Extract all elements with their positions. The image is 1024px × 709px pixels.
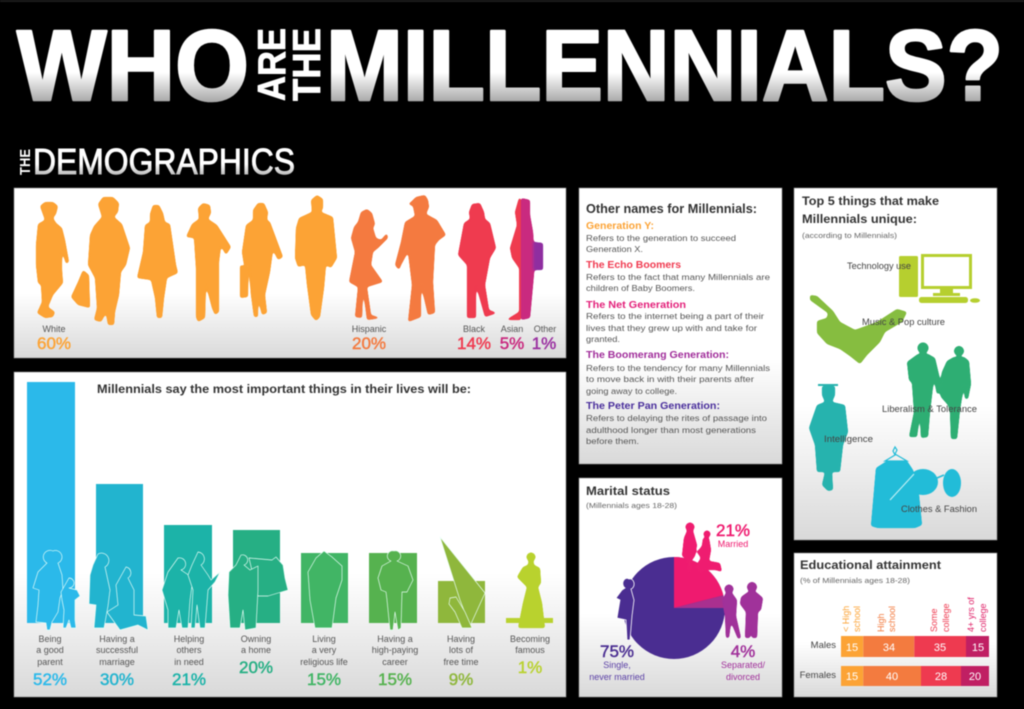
bar: successful marriage: marriage: [99, 657, 135, 667]
marital labels: 4%: [731, 642, 755, 661]
panel: educational attainment: [794, 553, 997, 697]
bar: helping others: [162, 525, 220, 689]
icon: graduate: [809, 384, 848, 491]
top-5 labels: Technology use: [847, 261, 911, 271]
bar: owning a home: a home: [241, 645, 271, 655]
stacked bar: males: 35: [934, 642, 946, 654]
name: boomerang generation: going away to college.: [586, 386, 677, 396]
stacked bar: males: [811, 636, 989, 657]
heading: (% of Millennials ages 18-28): [800, 576, 911, 585]
panel: top 5 things: [794, 188, 997, 540]
top-5 labels: Clothes & Fashion: [901, 504, 977, 514]
column labels: college: [941, 603, 951, 632]
column labels: college: [978, 603, 988, 632]
name: boomerang generation: [586, 350, 771, 396]
name: echo boomers: children of Baby Boomers.: [586, 283, 695, 293]
name: echo boomers: The Echo Boomers: [586, 260, 681, 271]
demographic labels: Other: [534, 324, 556, 334]
panel: most important things: [14, 372, 566, 697]
bar: successful marriage: Having a: [99, 634, 135, 644]
marital labels: Separated/: [721, 660, 766, 670]
title: THE: [286, 28, 329, 101]
panel: other names: [579, 188, 782, 464]
name: echo boomers: [586, 260, 770, 293]
bar: high-paying career: high-paying: [372, 645, 418, 655]
bar: being a good parent: a good: [36, 645, 64, 655]
icon: computer: [899, 254, 980, 303]
heading: Millennials say the most important things in their lives will be:: [97, 384, 471, 396]
heading: (according to Millennials): [802, 231, 898, 240]
bar: free time: lots of: [449, 645, 474, 655]
bar: free time: Having: [447, 634, 475, 644]
bar: religious life: 15%: [307, 670, 341, 689]
demographic labels: Asian: [501, 324, 523, 334]
bar: free time: 9%: [449, 670, 473, 689]
bar: owning a home: 20%: [239, 658, 273, 677]
stacked bar: females: 15: [846, 671, 858, 683]
bar: successful marriage: [89, 484, 148, 689]
heading: [802, 194, 939, 240]
heading: Other names for Millennials:: [586, 202, 757, 216]
top-5 labels: Liberalism & Tolerance: [882, 404, 977, 414]
bar: being a good parent: 52%: [33, 670, 67, 689]
bar: being a good parent: parent: [37, 657, 63, 667]
silhouettes: white: [36, 195, 337, 325]
marital labels: never married: [589, 672, 645, 682]
name: peter pan generation: [586, 401, 767, 446]
bar: helping others: 21%: [172, 670, 206, 689]
stacked bar: females: [800, 666, 989, 686]
bar: becoming famous: Becoming: [510, 634, 550, 644]
name: net generation: Refers to the internet being a part of their: [586, 311, 764, 321]
demographic labels: 1%: [532, 334, 556, 353]
heading: [800, 558, 941, 585]
bar: helping others: in need: [174, 657, 204, 667]
marital labels: divorced: [726, 672, 760, 682]
bar: successful marriage: successful: [96, 645, 138, 655]
stacked bar: females: 20: [969, 671, 981, 683]
name: net generation: The Net Generation: [586, 300, 686, 311]
name: net generation: lives that they grew up with and take for: [586, 323, 757, 333]
bar: owning a home: Owning: [241, 634, 271, 644]
stacked bar: males: 15: [846, 642, 858, 654]
figure: single: [616, 578, 634, 640]
bar: helping others: others: [176, 645, 202, 655]
stacked bar: males: Males: [811, 640, 836, 651]
bar: becoming famous: famous: [515, 645, 545, 655]
demographic labels: 60%: [37, 334, 71, 353]
bar: religious life: Living: [312, 634, 336, 644]
bar: being a good parent: [27, 382, 80, 689]
marital labels: [589, 521, 766, 682]
marital labels: 75%: [600, 642, 634, 661]
bar: religious life: a very: [312, 645, 337, 655]
silhouette: asian half: [506, 198, 521, 320]
icon: couple: [907, 342, 971, 439]
top-5 labels: Music & Pop culture: [862, 317, 945, 327]
column labels: school: [852, 606, 862, 632]
heading: [586, 484, 678, 510]
bar: becoming famous: 1%: [518, 658, 542, 677]
name: generation y: [586, 221, 736, 254]
stacked bar: females: 40: [886, 671, 898, 683]
bar: religious life: [300, 551, 348, 689]
title: [17, 10, 1003, 122]
bar: high-paying career: Having a: [377, 634, 413, 644]
section heading: the demographics: DEMOGRAPHICS: [33, 141, 295, 182]
bar: high-paying career: career: [382, 657, 408, 667]
bar: becoming famous: [506, 552, 553, 677]
name: generation y: Generation Y:: [586, 221, 654, 232]
name: echo boomers: Refers to the fact that many Millennials are: [586, 272, 770, 282]
name: net generation: [586, 300, 764, 344]
icon: dancer: [810, 295, 907, 364]
demographic labels: 14%: [457, 334, 491, 353]
silhouettes: black: [458, 198, 521, 320]
panel: marital status: [579, 478, 782, 697]
stacked bar: males: 15: [972, 642, 984, 654]
bar: free time: [438, 537, 485, 689]
bar: free time: free time: [443, 657, 479, 667]
heading: Educational attainment: [800, 558, 941, 572]
stacked bar: males: 34: [883, 642, 895, 654]
demographic labels: Hispanic: [352, 324, 387, 334]
demographic labels: Black: [463, 324, 486, 334]
figures: separated: [722, 582, 763, 639]
name: generation y: Refers to the generation to succeed: [586, 233, 736, 243]
column labels: High: [876, 613, 886, 632]
bar: high-paying career: 15%: [378, 670, 412, 689]
name: boomerang generation: The Boomerang Generation:: [586, 350, 729, 361]
icon: clothes: [871, 447, 961, 528]
demographic labels: [37, 324, 556, 353]
bar: helping others: Helping: [174, 634, 204, 644]
demographic labels: 5%: [500, 334, 524, 353]
bar: successful marriage: 30%: [100, 670, 134, 689]
title: ARE: [251, 28, 294, 101]
stacked bar: females: Females: [800, 670, 836, 681]
heading: Marital status: [586, 484, 670, 498]
silhouettes: hispanic: [349, 195, 446, 322]
column labels: Some: [929, 608, 939, 632]
name: peter pan generation: before them.: [586, 436, 639, 446]
column labels: < High: [841, 606, 851, 632]
bar: owning a home: [228, 530, 288, 677]
name: boomerang generation: to move back in with their parents after: [586, 374, 754, 384]
name: net generation: granted.: [586, 334, 620, 344]
name: generation y: Generation X.: [586, 244, 643, 254]
name: peter pan generation: Refers to delaying the rites of passage into: [586, 413, 767, 423]
heading: Top 5 things that make: [802, 194, 939, 208]
silhouette: other half: [521, 198, 543, 320]
section heading: the demographics: THE: [17, 149, 34, 175]
stacked bar: females: 28: [935, 671, 947, 683]
bar: being a good parent: Being: [38, 634, 62, 644]
panel: demographics: [14, 188, 566, 358]
name: peter pan generation: adulthood longer than most generations: [586, 425, 757, 435]
bar: high-paying career: [369, 551, 418, 689]
name: boomerang generation: Refers to the tendency for many Millennials: [586, 363, 771, 373]
column labels: 4+ yrs of: [966, 597, 976, 632]
marital labels: Single,: [603, 660, 631, 670]
marital labels: 21%: [716, 521, 750, 540]
demographic labels: 20%: [352, 334, 386, 353]
heading: (Millennials ages 18-28): [586, 501, 678, 510]
marital labels: Married: [718, 539, 748, 549]
top-5 labels: Intelligence: [824, 434, 873, 444]
demographic labels: White: [42, 324, 66, 334]
column labels: school: [887, 606, 897, 632]
heading: Millennials unique:: [802, 212, 917, 226]
title: WHO: [17, 10, 249, 122]
figures: married: [682, 522, 722, 573]
top-5 labels: [824, 261, 977, 514]
bar: religious life: religious life: [300, 657, 348, 667]
column labels: [841, 597, 988, 632]
pie chart: [623, 557, 725, 659]
name: peter pan generation: The Peter Pan Generation:: [586, 401, 720, 412]
